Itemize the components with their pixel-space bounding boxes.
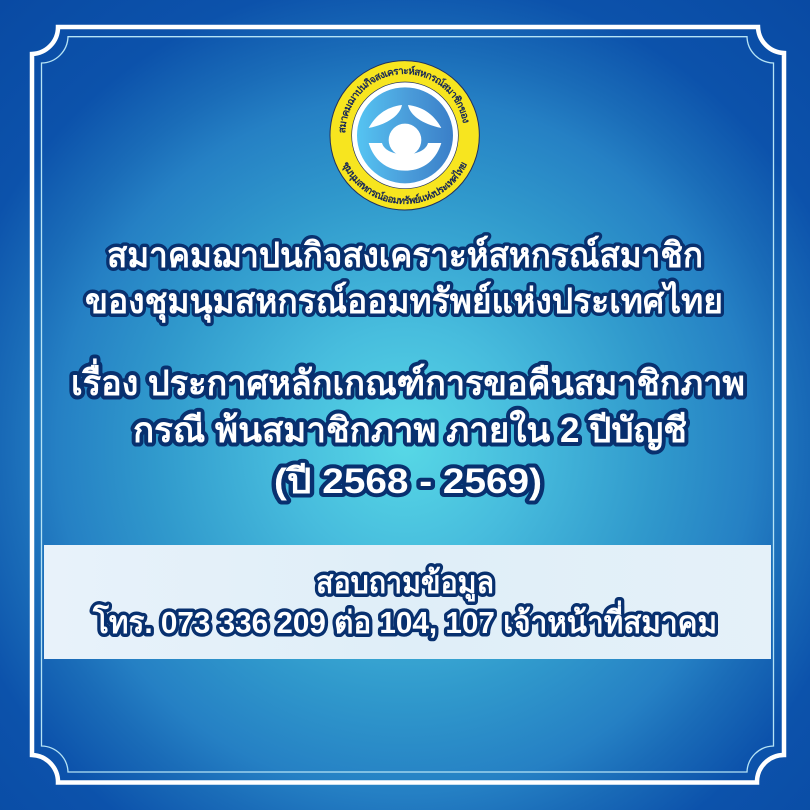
logo [330, 60, 480, 210]
heading: association name [85, 235, 723, 323]
logo white inner circle [352, 82, 458, 189]
heading: announcement subject: (ปี 2568 - 2569) [274, 462, 542, 501]
contact text [92, 565, 717, 640]
contact text: โทร. 073 336 209 ต่อ 104, 107 เจ้าหน้าที่สมาคม [92, 600, 717, 640]
heading: announcement subject: กรณี พ้นสมาชิกภาพ ภายใน 2 ปีบัญชี [133, 409, 687, 451]
heading: announcement subject [71, 358, 745, 501]
heading: association name: ของชุมนุมสหกรณ์ออมทรัพย์แห่งประเทศไทย [85, 280, 723, 323]
logo ring text bottom: ชุมนุมสหกรณ์ออมทรัพย์แห่งประเทศไทย [342, 162, 467, 204]
logo upper left crescent [369, 105, 402, 128]
logo lower crescent [369, 143, 441, 171]
contact text: สอบถามข้อมูล [316, 565, 494, 602]
logo ring text top: สมาคมฌาปนกิจสงเคราะห์สหกรณ์สมาชิกของ [339, 66, 469, 133]
contact panel [44, 545, 771, 659]
heading: announcement subject: เรื่อง ประกาศหลักเกณฑ์การขอคืนสมาชิกภาพ [71, 358, 745, 403]
logo yellow ring [330, 61, 479, 210]
logo blue disc [357, 87, 453, 183]
heading: association name: สมาคมฌาปนกิจสงเคราะห์สหกรณ์สมาชิก [107, 235, 703, 275]
logo upper right crescent [408, 105, 441, 128]
logo center circle [389, 124, 421, 156]
